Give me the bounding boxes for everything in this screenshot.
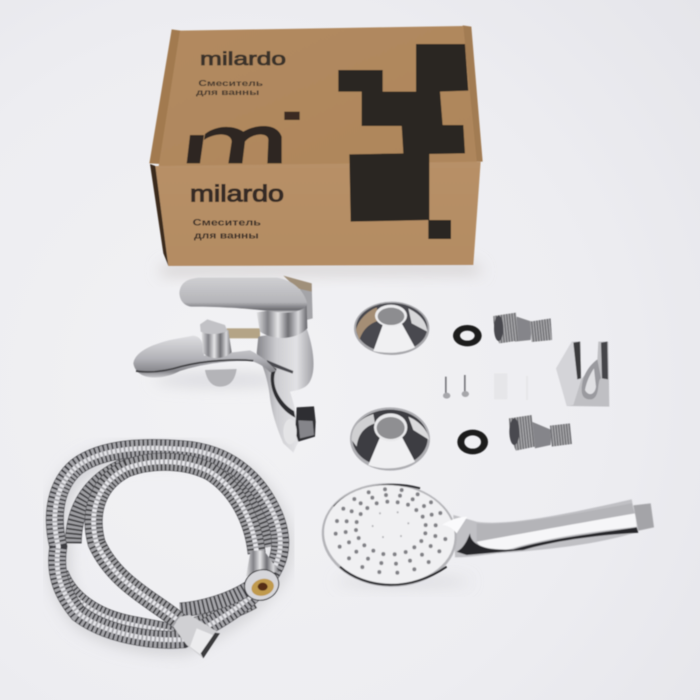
- nut collar: [283, 419, 297, 444]
- flanges, washers, screws and holder: [350, 302, 609, 471]
- box front face: [155, 162, 481, 266]
- bottom washer: [457, 430, 488, 454]
- product name on front: Смеситель: [193, 218, 262, 228]
- bottom flange: [350, 407, 430, 471]
- dark body reflection: [271, 367, 295, 418]
- spout dark underside line: [136, 360, 253, 372]
- brass stem: [227, 328, 260, 338]
- brown rear reflection: [283, 276, 312, 292]
- hex hose nut: [173, 615, 220, 658]
- wall plugs: [494, 373, 528, 400]
- top eccentric nipple: [493, 313, 552, 343]
- product name on lid: для ванны: [196, 88, 260, 97]
- handle end connector: [633, 503, 654, 531]
- box right flap: [463, 25, 483, 162]
- handle white reflection: [477, 513, 637, 550]
- shower head rim: [318, 479, 460, 591]
- screw right: [462, 375, 469, 397]
- hex nut face: [298, 420, 314, 438]
- box shadow: [160, 263, 483, 275]
- central small nozzles: [372, 511, 409, 538]
- m logo dot: [284, 112, 300, 120]
- brand name on front: milardo: [190, 181, 284, 207]
- screw left: [443, 377, 450, 399]
- bottom eccentric nipple: [509, 415, 572, 451]
- diverter knob cap: [200, 319, 227, 334]
- handle bright band: [477, 503, 635, 545]
- hose middle strands: [73, 457, 270, 628]
- box top face: [158, 26, 477, 168]
- shower head face: [321, 481, 458, 588]
- diverter knob: [202, 330, 232, 358]
- shower shadow: [337, 577, 470, 586]
- product name on front: для ванны: [194, 230, 259, 240]
- m logo letter: [187, 126, 282, 163]
- rim dark arcs: [334, 485, 447, 585]
- shower holder: [556, 342, 609, 407]
- spout: [133, 336, 277, 378]
- lever collar: [257, 304, 307, 338]
- cardboard box: [149, 25, 483, 275]
- box fold edge: [150, 164, 168, 266]
- small black square: [428, 220, 451, 239]
- top flange: [354, 302, 429, 355]
- faucet shadow: [153, 374, 287, 386]
- flexible shower hose: [55, 448, 283, 658]
- black pixel pattern: [338, 44, 468, 222]
- white thumb tab: [442, 517, 467, 533]
- shower handle: [453, 499, 638, 557]
- handle dark reflection: [457, 527, 638, 555]
- hose lower strand: [60, 573, 187, 637]
- conical hose fitting: [240, 551, 283, 605]
- spout foot: [205, 369, 237, 387]
- rear cartridge: [300, 283, 313, 322]
- hose short strand: [180, 588, 248, 610]
- brand name on lid: milardo: [200, 48, 286, 69]
- box left flap: [149, 29, 181, 164]
- spray nozzles: [334, 487, 447, 575]
- body shoulder highlight: [267, 360, 293, 374]
- hose shadow: [57, 453, 283, 644]
- hose inner strand: [94, 462, 257, 643]
- faucet body: [257, 328, 314, 453]
- hose outer loop: [55, 448, 280, 640]
- bath faucet: [133, 276, 316, 453]
- lever handle: [179, 278, 307, 313]
- product name on lid: Смеситель: [198, 79, 263, 88]
- hex outlet nut: [295, 406, 316, 442]
- hand shower: [318, 479, 654, 591]
- top washer: [453, 325, 482, 346]
